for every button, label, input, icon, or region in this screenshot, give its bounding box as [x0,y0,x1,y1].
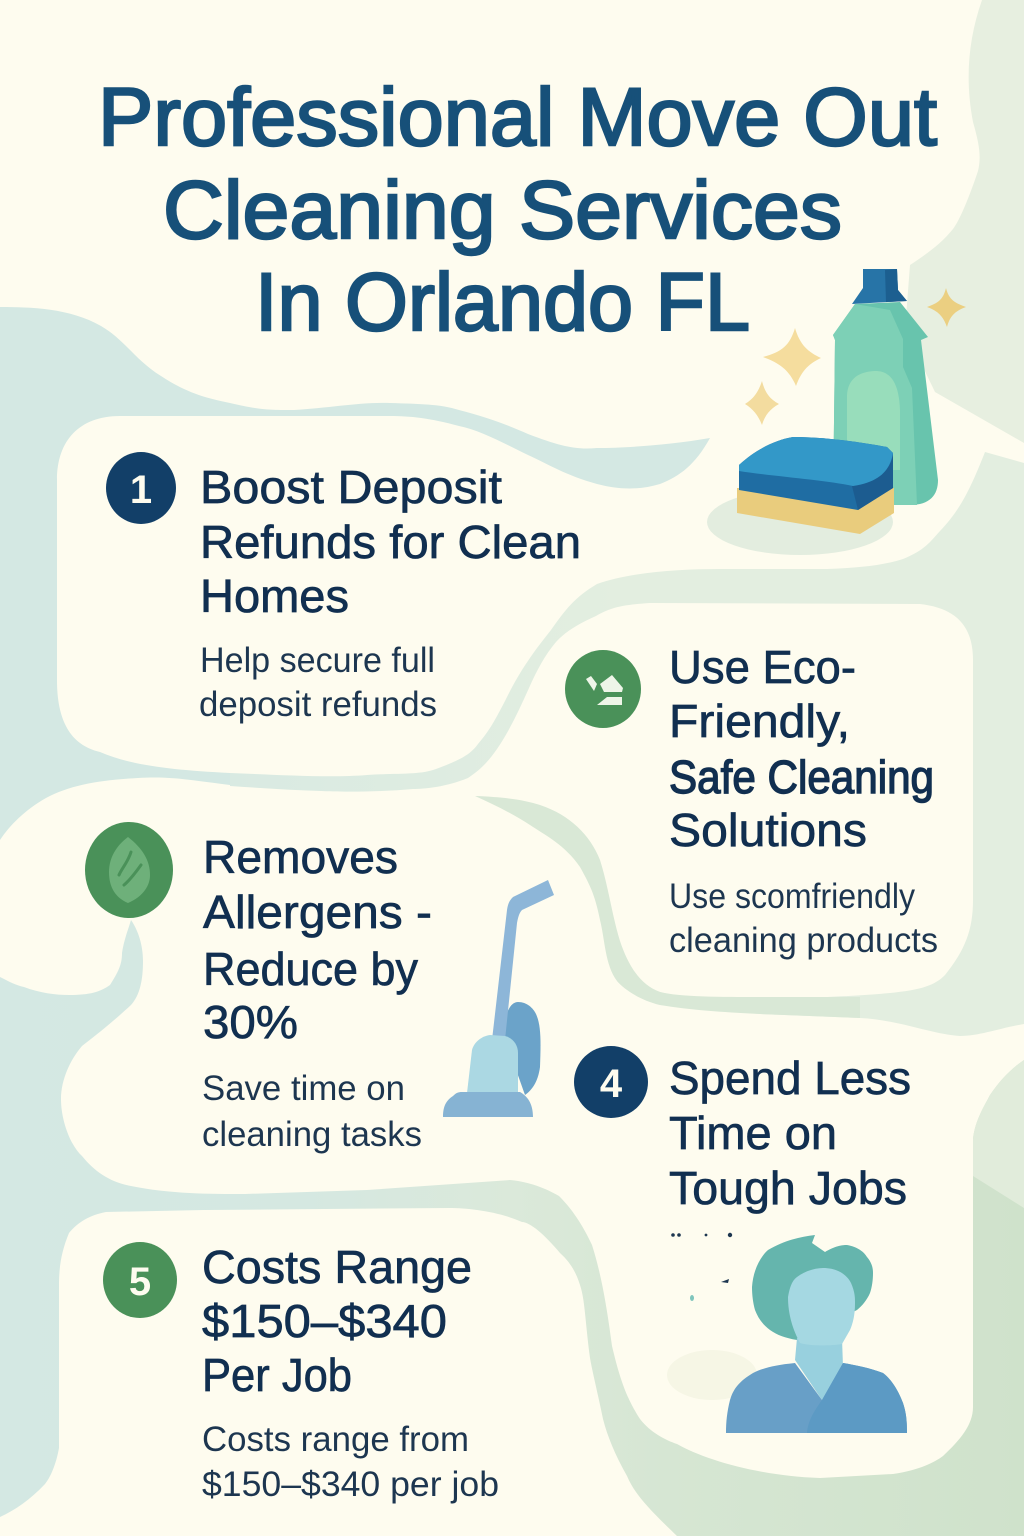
heading: spend less time: Spend Less [669,1052,911,1104]
text: eco description [669,877,938,960]
panel: costs range [103,1241,499,1504]
icon: eco cleaning [565,650,641,728]
heading: removes allergens [203,831,432,1048]
panel: removes allergens [85,822,554,1154]
text: deposit description: deposit refunds [199,685,437,724]
heading: costs range: Per Job [202,1349,352,1401]
heading: removes allergens: Removes [203,831,398,883]
heading: removes allergens: Allergens - [203,886,432,938]
icon: number 1: 1 [130,468,152,512]
text: costs description [202,1420,499,1504]
heading: boost deposit: Boost Deposit [200,461,502,513]
heading: eco-friendly: Friendly, [669,695,850,747]
icon: vacuum cleaner [443,880,554,1117]
title [98,72,937,348]
text: eco description: cleaning products [669,921,938,960]
heading: boost deposit [200,461,581,622]
heading: eco-friendly [669,641,934,856]
heading: boost deposit: Homes [200,570,349,622]
icon: number 5: 5 [129,1260,151,1304]
text: eco description: Use scomfriendly [669,877,915,916]
heading: costs range: Costs Range [202,1241,472,1293]
text: deposit description [199,641,437,724]
heading: removes allergens: Reduce by [203,943,418,995]
heading: eco-friendly: Use Eco- [669,641,856,693]
heading: eco-friendly: Safe Cleaning [669,751,934,803]
heading: costs range: $150–$340 [202,1295,447,1347]
heading: removes allergens: 30% [203,996,298,1048]
text: allergens description [202,1069,422,1154]
text: allergens description: Save time on [202,1069,405,1108]
heading: spend less time: Time on [669,1107,837,1159]
panel: boost deposit refunds [106,452,581,724]
icon: leaf [85,822,173,918]
panel: spend less time [574,1046,911,1433]
title: Cleaning Services [163,165,842,256]
icon: number 4 [574,1046,648,1118]
icon: person [667,1233,907,1433]
heading: spend less time: Tough Jobs [669,1162,907,1214]
title: In Orlando FL [255,257,750,348]
heading: boost deposit: Refunds for Clean [200,516,581,568]
text: deposit description: Help secure full [200,641,435,680]
text: costs description: $150–$340 per job [202,1465,499,1504]
icon: number 5 [103,1242,177,1318]
icon: number 4: 4 [600,1062,623,1106]
text: costs description: Costs range from [202,1420,469,1459]
title: Professional Move Out [98,72,937,163]
icon: bottle, sponge and sparkles [707,269,966,555]
text: allergens description: cleaning tasks [202,1115,422,1154]
panel: eco-friendly solutions [565,641,938,960]
heading: spend less time [669,1052,911,1214]
heading: eco-friendly: Solutions [669,804,867,856]
heading: costs range [202,1241,472,1401]
icon: number 1 [106,452,176,524]
